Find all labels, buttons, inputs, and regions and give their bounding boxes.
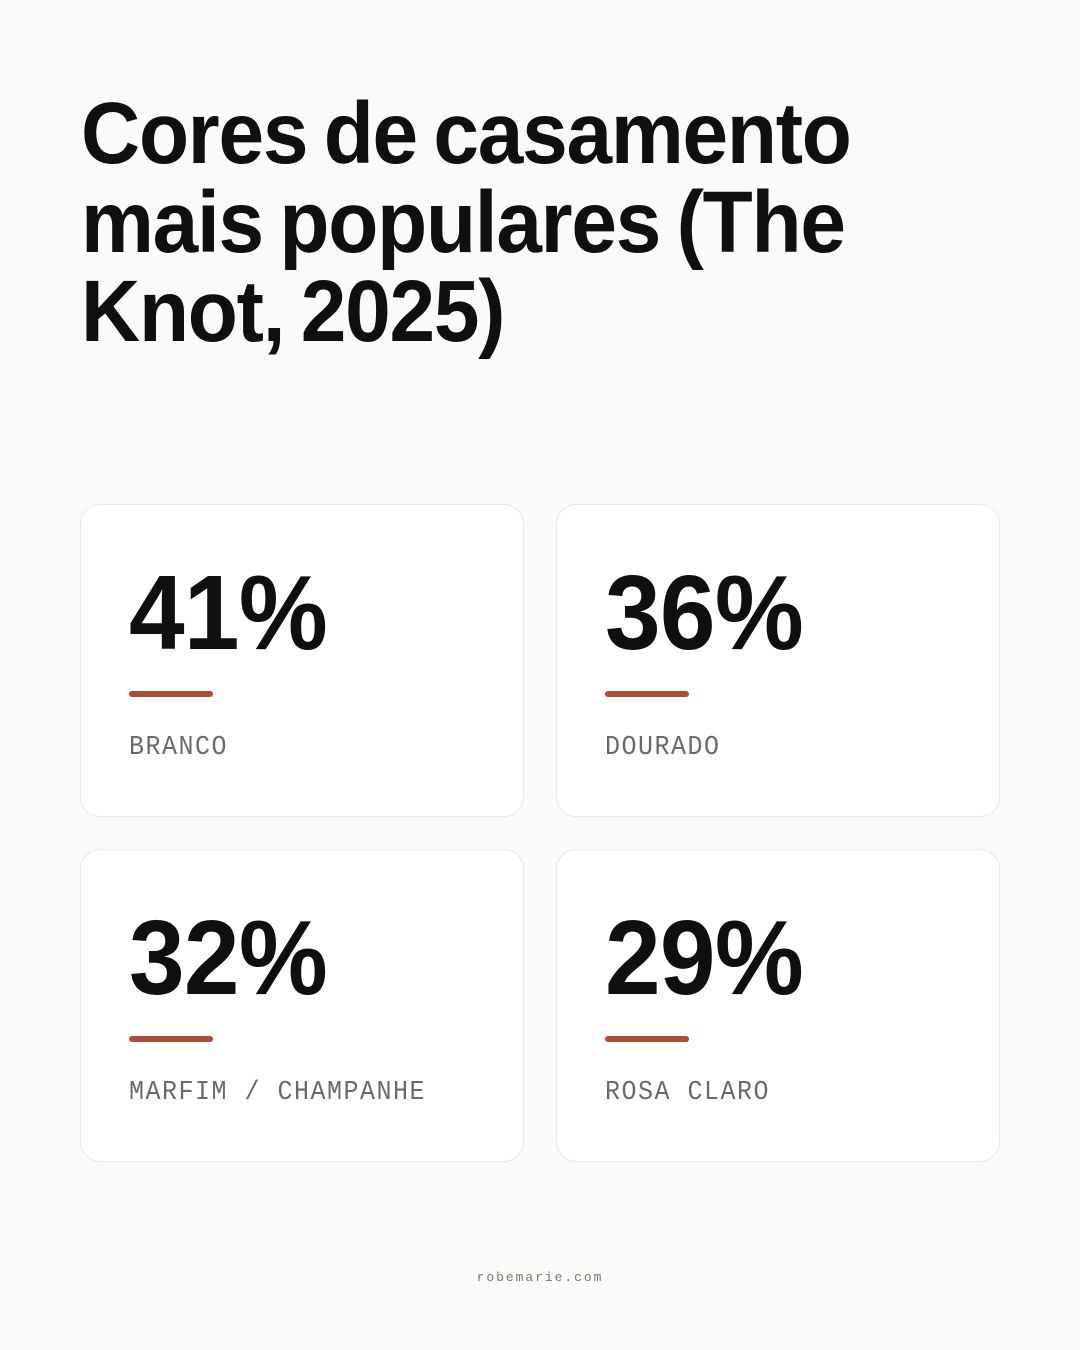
label: dourado: DOURADO bbox=[605, 732, 721, 762]
accent bar bbox=[129, 691, 213, 697]
label: rosa claro: ROSA CLARO bbox=[605, 1077, 770, 1107]
label: branco: BRANCO bbox=[129, 732, 228, 762]
panel: dourado 36% bbox=[556, 504, 1000, 817]
title: Cores de casamento mais populares (The Knot, 2025) bbox=[81, 86, 851, 360]
label: marfim / champanhe: MARFIM / CHAMPANHE bbox=[129, 1077, 426, 1107]
accent bar bbox=[605, 1036, 689, 1042]
panel: rosa claro 29% bbox=[556, 849, 1000, 1162]
stat: 29%: 29% bbox=[605, 899, 803, 1017]
panel: marfim / champanhe 32% bbox=[80, 849, 524, 1162]
stat: 32%: 32% bbox=[129, 899, 327, 1017]
accent bar bbox=[605, 691, 689, 697]
stat: 36%: 36% bbox=[605, 554, 803, 672]
stat: 41%: 41% bbox=[129, 554, 327, 672]
accent bar bbox=[129, 1036, 213, 1042]
panel: branco 41% bbox=[80, 504, 524, 817]
footer source: robemarie.com bbox=[477, 1270, 603, 1285]
